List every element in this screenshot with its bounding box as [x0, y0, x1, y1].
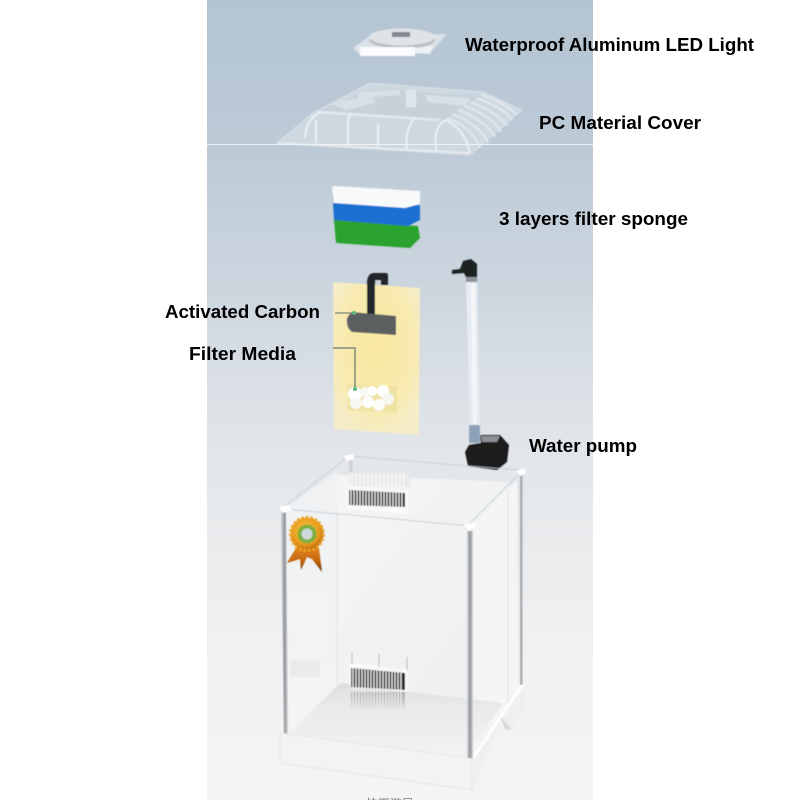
- ghost vent reflection: [290, 660, 320, 677]
- icon: 3-layer filter sponge: [332, 186, 420, 248]
- leader line: filter media: [333, 348, 355, 388]
- corner rods: [281, 512, 288, 733]
- label: Waterproof Aluminum LED Light: Waterproof Aluminum LED Light: [465, 35, 754, 55]
- icon: LED light: [353, 28, 447, 56]
- right side glass: [473, 480, 517, 750]
- label: 3 layers filter sponge: 3 layers filter sponge: [499, 209, 688, 229]
- floor: [290, 683, 503, 757]
- label: PC Material Cover: PC Material Cover: [539, 113, 701, 133]
- label: Activated Carbon: Activated Carbon: [165, 302, 320, 322]
- lower vent: [350, 652, 407, 710]
- top rim glass edges: [285, 456, 520, 526]
- icon: water pump: [452, 259, 509, 470]
- label: Water pump: Water pump: [529, 436, 637, 456]
- icon: PC material cover: [277, 83, 522, 155]
- horizontal seam line: [207, 144, 593, 145]
- corner caps: [279, 454, 526, 530]
- label: Filter Media: Filter Media: [189, 344, 297, 364]
- filter media pellets: [348, 385, 397, 413]
- left glass face: [284, 470, 337, 733]
- icon: filter media block: [333, 273, 420, 435]
- background panel: [207, 0, 593, 800]
- back panel: [337, 475, 510, 703]
- icon: award medal: [287, 518, 324, 572]
- aquarium tank: [279, 454, 526, 790]
- activated carbon: [347, 273, 396, 335]
- leader line: activated carbon: [335, 312, 354, 314]
- upper vent: [348, 473, 410, 514]
- base: [280, 683, 526, 790]
